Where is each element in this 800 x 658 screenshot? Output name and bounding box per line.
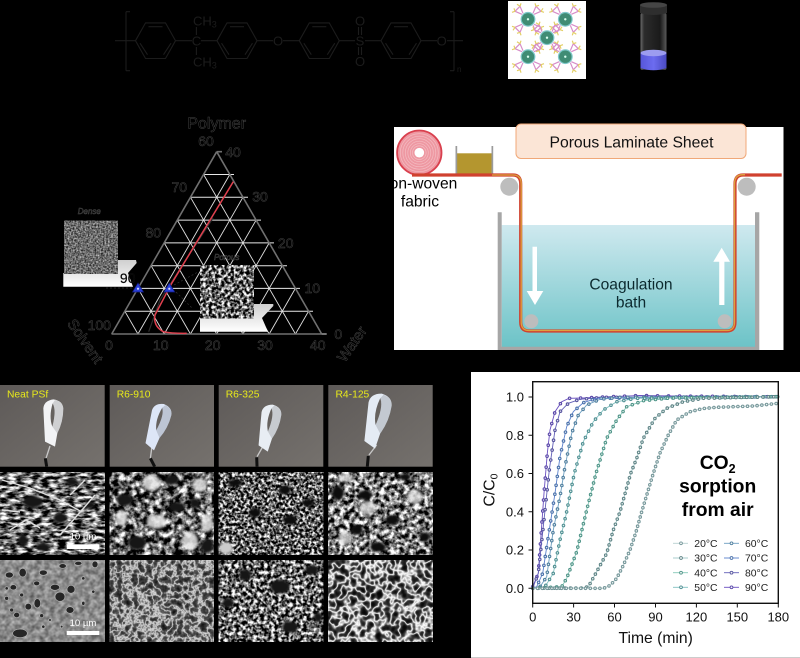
x axis labels: 120 bbox=[686, 610, 707, 625]
ternary grid bbox=[112, 152, 327, 334]
composition markers bbox=[106, 272, 198, 308]
chemical structure: polysulfone repeat unit: CH bbox=[193, 54, 212, 70]
ternary phase diagram bbox=[63, 115, 371, 367]
legend: 90°C bbox=[745, 583, 769, 594]
chemical structure: polysulfone repeat unit: O bbox=[355, 54, 365, 69]
label: porous laminate sheet bbox=[516, 124, 746, 158]
breakthrough curves bbox=[533, 396, 778, 588]
y axis labels: 0.0 bbox=[506, 581, 524, 596]
chemical structure: polysulfone repeat unit: 3 bbox=[212, 20, 217, 30]
SEM: neat PSf surface: 10 µm bbox=[70, 531, 96, 542]
y axis labels bbox=[506, 390, 524, 596]
arrow: downward bbox=[527, 247, 543, 305]
ternary labels: Polymer bbox=[187, 115, 247, 132]
panel: SEM micrographs row 1 bbox=[0, 472, 433, 555]
sheet path bbox=[412, 175, 782, 331]
x axis labels: 0 bbox=[529, 610, 536, 625]
axes frame and ticks bbox=[528, 382, 778, 608]
photo: neat PSf bbox=[0, 385, 105, 467]
y axis title: 0 bbox=[488, 473, 500, 479]
legend: 80°C bbox=[745, 568, 769, 579]
y axis labels: 1.0 bbox=[506, 390, 524, 405]
label: non-woven fabric: Non-woven bbox=[378, 175, 457, 192]
x axis labels: 30 bbox=[566, 610, 581, 625]
SEM: R6-325 surface bbox=[219, 472, 323, 555]
inset: dense membrane: Dense bbox=[78, 207, 101, 216]
chemical structure: polysulfone repeat unit: CH bbox=[193, 14, 212, 28]
SEM: neat PSf cross-section bbox=[0, 560, 105, 642]
SEM: R6-910 surface bbox=[110, 472, 214, 555]
ternary labels: 80 bbox=[146, 225, 161, 241]
photo: R6-325: R6-325 bbox=[226, 389, 260, 400]
ternary labels: 0 bbox=[105, 337, 113, 353]
SEM: R6-325 cross-section bbox=[219, 560, 323, 642]
fabric roll bbox=[397, 130, 441, 175]
x axis labels: 180 bbox=[767, 610, 789, 625]
ternary labels: 20 bbox=[205, 337, 221, 353]
icon: MOF crystal structure bbox=[508, 1, 586, 79]
ternary labels: 30 bbox=[257, 337, 273, 353]
panel: CO2 breakthrough chart bbox=[471, 372, 800, 658]
legend: 50°C bbox=[694, 583, 718, 594]
panel: SEM micrographs row 2 bbox=[0, 560, 433, 642]
photo: neat PSf: Neat PSf bbox=[7, 389, 48, 400]
y axis title: C/C bbox=[482, 479, 498, 506]
chemical structure: polysulfone repeat unit: 3 bbox=[212, 60, 217, 70]
chemical structure: polysulfone repeat unit: O bbox=[273, 34, 283, 48]
label: coagulation bath: Coagulation bbox=[589, 276, 673, 293]
y axis labels: 0.2 bbox=[506, 543, 524, 558]
y axis labels: 0.6 bbox=[506, 466, 524, 481]
ternary labels: 20 bbox=[278, 235, 294, 251]
arrow: upward bbox=[713, 248, 730, 305]
chart title: 2 bbox=[729, 462, 736, 476]
ternary labels: 0 bbox=[334, 326, 342, 342]
photo: R6-910 bbox=[110, 385, 214, 467]
x axis labels: 60 bbox=[607, 610, 622, 625]
chart title: sorption bbox=[679, 477, 756, 498]
SEM: R4-125 cross-section bbox=[328, 560, 433, 642]
ternary labels: 90 bbox=[120, 270, 136, 286]
label: porous laminate sheet: Porous Laminate Sheet bbox=[550, 134, 714, 151]
legend: 20°C bbox=[694, 539, 718, 550]
chemical structure: polysulfone repeat unit: O bbox=[437, 34, 447, 48]
photo: R6-910: R6-910 bbox=[117, 389, 151, 400]
legend bbox=[673, 539, 769, 594]
SEM: R4-125 surface bbox=[328, 472, 433, 555]
ternary labels: 100 bbox=[88, 317, 111, 333]
SEM: R6-910 cross-section bbox=[110, 560, 214, 642]
legend: 30°C bbox=[694, 554, 718, 565]
inset: porous membrane bbox=[200, 253, 273, 332]
ternary labels: 10 bbox=[305, 280, 320, 296]
photo: R4-125 bbox=[328, 385, 433, 467]
panel: roll-to-roll coating schematic bbox=[394, 124, 784, 350]
x axis title: Time (min) bbox=[619, 630, 693, 647]
inset: dense membrane bbox=[63, 207, 137, 287]
ternary labels: 40 bbox=[225, 144, 241, 160]
ternary labels: 30 bbox=[252, 189, 268, 205]
ternary labels: 40 bbox=[310, 337, 326, 353]
SEM: neat PSf cross-section: 10 µm bbox=[70, 618, 96, 629]
x axis labels bbox=[529, 610, 789, 625]
legend: 70°C bbox=[745, 554, 769, 565]
SEM: neat PSf surface bbox=[0, 472, 105, 555]
legend: 40°C bbox=[694, 568, 718, 579]
ternary labels: Solvent bbox=[63, 316, 106, 367]
chemical structure: polysulfone repeat unit: O bbox=[355, 14, 365, 28]
binodal lines bbox=[149, 182, 233, 333]
chemical structure: polysulfone repeat unit: S bbox=[356, 34, 365, 48]
photo: R6-325 bbox=[219, 385, 323, 467]
legend: 60°C bbox=[745, 539, 769, 550]
inset: porous membrane: Porous bbox=[214, 253, 239, 262]
label: coagulation bath: bath bbox=[616, 295, 646, 312]
ternary labels: 60 bbox=[198, 133, 214, 149]
casting solution hopper bbox=[456, 146, 493, 175]
chemical structure: polysulfone repeat unit bbox=[115, 12, 463, 74]
label: non-woven fabric: fabric bbox=[401, 194, 439, 211]
chart title: CO bbox=[700, 453, 729, 474]
coagulation tank bbox=[498, 212, 759, 350]
rollers bbox=[500, 178, 756, 328]
chart title: from air bbox=[682, 500, 754, 521]
ternary labels bbox=[63, 115, 371, 367]
panel: membrane photos bbox=[0, 385, 433, 467]
ternary labels: 10 bbox=[153, 337, 169, 353]
chemical structure: polysulfone repeat unit: n bbox=[457, 65, 461, 74]
y axis labels: 0.4 bbox=[506, 504, 524, 519]
x axis labels: 150 bbox=[726, 610, 748, 625]
x axis labels: 90 bbox=[648, 610, 663, 625]
ternary labels: 70 bbox=[172, 179, 187, 195]
photo: R4-125: R4-125 bbox=[336, 389, 370, 400]
icon: vial with blue liquid bbox=[640, 2, 667, 70]
chemical structure: polysulfone repeat unit: C bbox=[192, 34, 201, 48]
y axis labels: 0.8 bbox=[506, 428, 524, 443]
ternary labels: Water bbox=[334, 323, 371, 365]
